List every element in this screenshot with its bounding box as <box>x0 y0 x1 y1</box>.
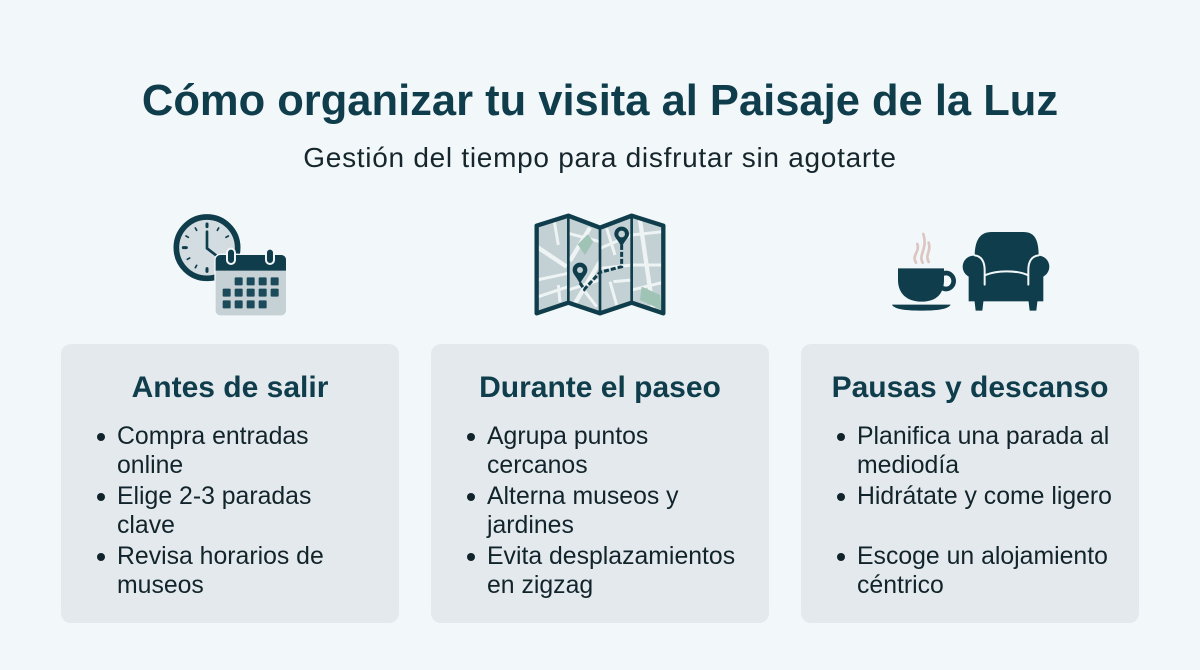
list: pausas y descanso: mediodía <box>857 452 959 479</box>
list: antes de salir: Revisa horarios de <box>117 543 324 570</box>
list: durante el paseo <box>467 423 735 599</box>
list: durante el paseo: jardines <box>487 512 574 539</box>
list: antes de salir: clave <box>117 512 175 539</box>
list: durante el paseo: Agrupa puntos <box>487 423 648 450</box>
icon: clock and calendar <box>176 217 286 315</box>
list: pausas y descanso: céntrico <box>857 572 944 599</box>
icon: coffee cup and armchair <box>892 232 1049 311</box>
panel: antes de salir <box>61 344 399 623</box>
list: antes de salir: Compra entradas <box>117 423 309 450</box>
subtitle: Gestión del tiempo para disfrutar sin agotarte <box>303 142 897 173</box>
list: antes de salir <box>97 423 324 599</box>
list: antes de salir: Elige 2-3 paradas <box>117 483 311 510</box>
list: durante el paseo: cercanos <box>487 452 588 479</box>
panel: pausas y descanso <box>801 344 1139 623</box>
heading: durante el paseo: Durante el paseo <box>479 371 721 404</box>
list: durante el paseo: Evita desplazamientos <box>487 543 735 570</box>
panel: durante el paseo <box>431 344 769 623</box>
list: durante el paseo: en zigzag <box>487 572 593 599</box>
list: antes de salir: museos <box>117 572 204 599</box>
list: pausas y descanso: Hidrátate y come ligero <box>857 483 1112 510</box>
title: Cómo organizar tu visita al Paisaje de la Luz <box>142 77 1058 125</box>
heading: pausas y descanso: Pausas y descanso <box>832 371 1108 404</box>
list: pausas y descanso: Planifica una parada al <box>857 423 1109 450</box>
list: pausas y descanso <box>837 423 1112 599</box>
list: pausas y descanso: Escoge un alojamiento <box>857 543 1108 570</box>
heading: antes de salir: Antes de salir <box>132 371 328 404</box>
icon: folded map with route <box>537 216 663 313</box>
list: antes de salir: online <box>117 452 183 479</box>
list: durante el paseo: Alterna museos y <box>487 483 679 510</box>
